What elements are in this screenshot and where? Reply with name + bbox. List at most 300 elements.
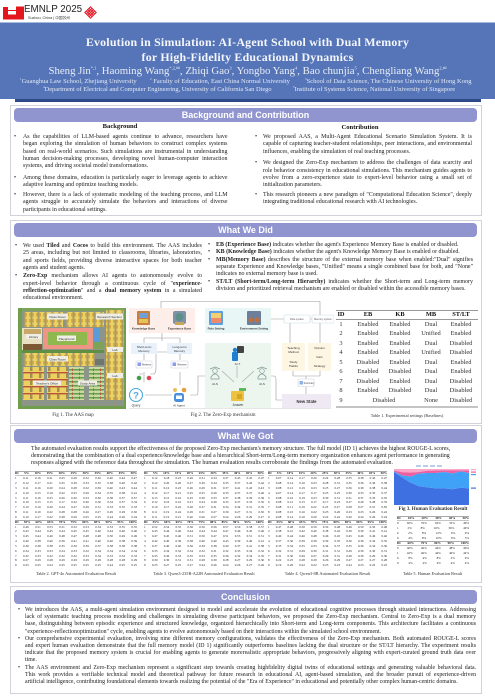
bullet 1: base, distinguishing between episodic experience and structured knowledge, organized hierarchically into Short-term and Long-term components. This architecture facilitates a continuous <box>25 621 476 627</box>
table 2: GPT-4o results: 7 0.10 0.16 0.20 0.24 0.27 0.29 0.31 0.33 0.35 0.33 <box>15 505 137 509</box>
subheading: background: Background <box>103 123 137 130</box>
text block: evaluation summary: demonstrating that the combination of a dual experience/knowledge base and a hierarchical Short-term/Long-term memory organization enhances agent performance in generating <box>31 453 450 459</box>
bullet 2: educational environment. <box>23 295 83 301</box>
table 1 column ST/LT: Disabled <box>450 397 472 404</box>
bullet 1: As the capabilities of LLM-based agents continue to advance, researchers have <box>23 134 228 140</box>
table 1 column KB: Enabled <box>390 359 410 366</box>
affiliations line 2: 5Institute of Systems Science, National University of Singapore <box>293 85 455 93</box>
panel: what we did <box>10 220 482 424</box>
table 1 column MB: Dual <box>425 368 437 375</box>
opinion box <box>308 343 331 371</box>
table 1 column ID <box>337 311 345 404</box>
long-term memory box <box>167 343 192 354</box>
heading: what we got: What We Got <box>218 431 273 441</box>
bullet 1 <box>15 242 202 271</box>
icon: answer: Answer <box>233 403 244 407</box>
table 1 column ST/LT: Enabled <box>451 368 471 375</box>
bullet 2: Zero-Exp mechanism allows AI agents to autonomously evolve to <box>23 273 202 279</box>
table 2: GPT-4o results: 4 0.40 0.38 0.40 0.39 0.41 0.41 0.40 0.40 0.38 0.39 <box>15 539 137 543</box>
heading: conclusion <box>14 590 477 604</box>
text block: conclusion bullets: • <box>18 636 20 642</box>
decision markers <box>137 376 151 380</box>
table 4: Qwen3-8B results <box>268 471 387 567</box>
table 2: GPT-4o results <box>15 471 137 567</box>
table 1 column ID: 5 <box>339 359 343 366</box>
bullet 1: agents and student agents. <box>23 265 85 271</box>
icon: red knot <box>84 6 97 19</box>
table 5: human evaluation: 0 46% 46% 44% 48% 46% <box>397 546 469 550</box>
table 1 column KB: Disabled <box>389 368 411 375</box>
bullet 1: We proposed AAS, a Multi-Agent Educational Scenario Simulation System. It is capable of capturing teacher-student relationships, peer interactions, and environmental influences, enabling the simulation of real teaching processes. <box>263 134 472 154</box>
text block: configuration definitions: • <box>208 242 210 248</box>
table 4: Qwen3-8B results: 1 0.07 0.14 0.17 0.20 0.24 0.28 0.35 0.38 0.43 0.47 <box>268 476 387 480</box>
bullet 3: agents struggle to accurately simulate the behaviors and interactions of diverse <box>23 199 228 205</box>
icon: query <box>130 388 142 408</box>
table 1 column KB: Enabled <box>390 330 410 337</box>
table 4: Qwen3-8B results: 8 0.22 0.25 0.28 0.29 0.26 0.29 0.27 0.27 0.27 0.28 <box>268 558 387 562</box>
table 1 column KB: KB <box>395 311 405 318</box>
table 1 column MB: Dual <box>425 340 437 347</box>
text block: configuration definitions <box>208 242 473 292</box>
table 1 column ST/LT: Enabled <box>451 321 471 328</box>
table 5: human evaluation: 6 2% 8% 12% 6% 6% <box>397 531 469 535</box>
subheading: contribution: Contribution <box>341 124 378 131</box>
heading: what we did: What We Did <box>218 225 273 235</box>
panel: memory bases <box>129 308 195 333</box>
table 1 column KB: Disabled <box>389 387 411 394</box>
table 5: human evaluation: ID 60% 70% 80% 90% 100% <box>397 541 469 545</box>
teaching method box: Habits <box>289 364 298 368</box>
table 4: Qwen3-8B results: 9 0.19 0.20 0.22 0.22 0.23 0.23 0.24 0.23 0.22 0.23 <box>268 563 387 567</box>
text block: configuration definitions: • <box>208 257 210 263</box>
figure: AAS map: Study Area <box>80 382 95 386</box>
header banner <box>0 22 495 99</box>
bullet 2 <box>15 272 202 301</box>
text block: background bullets: • <box>14 175 16 181</box>
text block: environment bullets: • <box>15 243 17 249</box>
bullet 2: time. <box>25 657 37 663</box>
area: ID 0 <box>394 472 469 505</box>
text block: evaluation summary: responses aligned with the reference data throughout the simulation. The human evaluation results corroborate the findings from the automated evaluation. <box>31 460 393 466</box>
caption: table 2: Table 2. GPT-4o Automated Evaluation Result <box>36 571 116 576</box>
affiliations line 2: 4Department of Electrical and Computer Engineering, University of California San Diego <box>43 85 272 93</box>
panel: background and contribution <box>10 105 482 216</box>
table 1 rules <box>336 310 478 408</box>
table 1 column ID: 8 <box>339 387 343 394</box>
table 4: Qwen3-8B results: 6 0.08 0.12 0.15 0.17 0.17 0.23 0.27 0.29 0.28 0.33 <box>268 500 387 504</box>
text block: contribution bullets: • <box>255 134 257 140</box>
icon: query: Query <box>132 404 141 408</box>
table 4: Qwen3-8B results: ID 55% 60% 65% 70% 75% 80% 85% 90% 95% 100% <box>268 520 387 524</box>
text block: conclusion bullets: • <box>18 607 20 613</box>
table 5: human evaluation: 0 92% 76% 62% 52% 49% <box>397 521 469 525</box>
text block: background bullets: • <box>14 134 16 140</box>
bullet 1: systems, and driving societal model transformations. <box>23 163 148 169</box>
new state box: New State <box>296 399 317 404</box>
bullet 1: human decision-making processes, developing novel human-computer interaction <box>23 156 228 162</box>
header underline bar <box>15 99 481 102</box>
bullet 1 <box>14 134 228 169</box>
table 5: human evaluation: 1 42% 46% 44% 46% 44% <box>397 551 469 555</box>
table 2: GPT-4o results: 1 0.49 0.51 0.53 0.51 0.52 0.53 0.54 0.53 0.55 0.55 <box>15 525 137 529</box>
definition MB: MB(Memory Base) describes the structure of the external memory base when enabled:"Dual" signifies separate Experience and Knowledge bases, "Unified" means a single combined base for both, and "None" indicates no external memory base is used. <box>216 257 473 277</box>
table 3: Qwen3-235B results: 5 0.37 0.40 0.40 0.36 0.39 0.38 0.40 0.37 0.41 0.38 <box>144 544 264 548</box>
table 1 column KB <box>388 311 412 394</box>
table 5: human evaluation: 6 8% 4% 8% 2% 6% <box>397 556 469 560</box>
figure: AAS map: Research Section <box>97 315 122 319</box>
figure: AAS map: Class Room <box>49 315 66 319</box>
table 5: human evaluation: 1 2% 8% 16% 36% 40% <box>397 526 469 530</box>
table 4: Qwen3-8B results: 5 0.35 0.34 0.35 0.33 0.34 0.37 0.35 0.36 0.34 0.36 <box>268 544 387 548</box>
figure: AAS map: Teacher's Office <box>36 382 58 386</box>
panel: what we got <box>10 425 482 583</box>
table 3: Qwen3-235B results: 5 0.13 0.15 0.22 0.25 0.30 0.33 0.37 0.38 0.39 0.39 <box>144 496 264 500</box>
table 2: GPT-4o results: 3 0.11 0.16 0.20 0.24 0.28 0.32 0.36 0.40 0.43 0.44 <box>15 486 137 490</box>
figure: AAS map: Library <box>29 335 39 339</box>
teaching method box: Study <box>290 360 298 364</box>
bullet 1 <box>18 606 476 635</box>
area: ID 1 <box>394 471 469 489</box>
table 1 column ID: 6 <box>339 368 343 375</box>
table 3: Qwen3-235B results: ID 5% 10% 15% 20% 25% 30% 35% 40% 45% 50% <box>144 471 264 475</box>
table 3: Qwen3-235B results: 1 0.12 0.18 0.23 0.26 0.31 0.34 0.37 0.43 0.45 0.47 <box>144 476 264 480</box>
table 1 column MB: Dual <box>425 321 437 328</box>
table 5: human evaluation: ID 10% 20% 30% 40% 50% <box>397 516 469 520</box>
table 4: Qwen3-8B results: 2 0.38 0.41 0.42 0.40 0.38 0.42 0.39 0.39 0.41 0.41 <box>268 529 387 533</box>
affiliations line 1 <box>20 77 472 85</box>
table 1 column MB: Dual <box>425 387 437 394</box>
table 1 column ID: ID <box>337 311 345 318</box>
table 4: Qwen3-8B results: 4 0.37 0.36 0.39 0.39 0.39 0.35 0.36 0.36 0.34 0.35 <box>268 539 387 543</box>
table 2: GPT-4o results: 4 0.10 0.15 0.19 0.22 0.25 0.29 0.34 0.35 0.38 0.41 <box>15 491 137 495</box>
icon: knowledge base <box>137 311 150 325</box>
figure: AAS map: Class Room <box>49 358 66 362</box>
table 1: experimental settings <box>336 310 478 408</box>
logo location line: Suzhou, China | 中国苏州 <box>28 16 70 20</box>
table 1 column EB: Disabled <box>357 359 379 366</box>
panel: setup: Role Setting <box>208 326 225 330</box>
bullet 2: reflection-optimization" and a dual memory system in a simulated <box>23 288 202 294</box>
bullet 2: adaptive learning and optimize teaching models. <box>23 182 138 188</box>
panel: setup <box>205 308 271 333</box>
figure: AAS map <box>18 308 126 409</box>
bullet 3: However, there is a lack of systematic modeling of the teaching process, and LLM <box>23 192 228 198</box>
table 3: Qwen3-235B results: 3 0.47 0.45 0.46 0.51 0.50 0.47 0.51 0.53 0.51 0.51 <box>144 534 264 538</box>
text block: contribution bullets <box>255 134 472 205</box>
panel: setup: Environment Setting <box>240 326 268 330</box>
short-term memory box: Short-term <box>137 345 152 349</box>
heading: background and contribution: Background and Contribution <box>182 110 309 120</box>
table 4: Qwen3-8B results: 4 0.07 0.14 0.17 0.17 0.23 0.25 0.30 0.33 0.35 0.37 <box>268 491 387 495</box>
table 1 column KB: Enabled <box>390 340 410 347</box>
icon: AI teacher: AI-T <box>235 362 240 366</box>
small boxes: role and memory system: Memory system <box>314 318 332 321</box>
text block: environment bullets <box>15 242 202 301</box>
bullet 1: began exploring the simulation of human behaviors to construct complex systems <box>23 141 228 147</box>
table 1 column KB: Enabled <box>390 321 410 328</box>
table 3: Qwen3-235B results: 6 0.35 0.34 0.32 0.34 0.32 0.31 0.32 0.33 0.34 0.32 <box>144 549 264 553</box>
caption: figure 1: Fig 1. The AAS map <box>52 413 94 418</box>
table 1 column ID: 2 <box>339 330 343 337</box>
table 3: Qwen3-235B results: 7 0.35 0.36 0.33 0.35 0.33 0.35 0.36 0.32 0.34 0.35 <box>144 554 264 558</box>
table 2: GPT-4o results: 9 0.10 0.17 0.22 0.28 0.26 0.25 0.25 0.24 0.26 0.24 <box>15 515 137 519</box>
panel: memory bases: Experience Base <box>168 326 191 330</box>
table 1 column ST/LT: Disabled <box>450 349 472 356</box>
table 1 column MB: Unified <box>421 349 441 356</box>
table 1 column ID: 9 <box>339 397 343 404</box>
figure: AAS map: Lab <box>112 348 118 352</box>
panel: classroom interaction <box>205 343 271 408</box>
teaching method box: Method <box>288 350 299 354</box>
table 1 column ST/LT: Enabled <box>451 330 471 337</box>
text block: background bullets: • <box>14 192 16 198</box>
panel: memory bases: Knowledge Base <box>132 326 155 330</box>
authors: Sheng Jin*,1, Haoming Wang*,2,✉, Zhiqi Gao3, Yongbo Yang4, Bao chunjia5, Chengliang Wang2,✉ <box>48 65 447 77</box>
table 1 column ST/LT: Enabled <box>451 359 471 366</box>
table 1 column ID: 4 <box>339 349 343 356</box>
heading: what we got <box>14 429 477 443</box>
table 1 disabled merged cell: Disabled <box>373 397 395 404</box>
table 4: Qwen3-8B results: 9 0.08 0.14 0.16 0.20 0.22 0.22 0.20 0.24 0.26 0.24 <box>268 515 387 519</box>
caption: table 1: Table 1. Experimental settings (Baselines) <box>371 413 443 418</box>
logo wordmark: EMNLP 2025 <box>24 4 82 15</box>
table 4: Qwen3-8B results: 7 0.08 0.11 0.19 0.22 0.23 0.27 0.28 0.27 0.31 0.30 <box>268 505 387 509</box>
table 2: GPT-4o results: 6 0.10 0.15 0.15 0.17 0.22 0.26 0.30 0.34 0.37 0.34 <box>15 500 137 504</box>
bullet 2: expert-level behavior through a continuous cycle of "experience- <box>23 281 202 287</box>
opinion box: Fact <box>316 355 323 359</box>
table 3: Qwen3-235B results: 2 0.45 0.44 0.46 0.44 0.44 0.44 0.47 0.46 0.45 0.46 <box>144 529 264 533</box>
table 1 column MB: None <box>424 397 438 404</box>
table 3: Qwen3-235B results <box>144 471 264 567</box>
table 4: Qwen3-8B results: 8 0.08 0.10 0.16 0.22 0.23 0.26 0.23 0.23 0.26 0.24 <box>268 510 387 514</box>
table 1 column MB: Dual <box>425 378 437 385</box>
bullet 3: The AAS environment and Zero-Exp mechanism represent a significant step towards creating highfidelity digital twins of educational settings and generating valuable behavioral data. <box>25 665 476 671</box>
caption: figure 2: Fig 2. The Zero-Exp mechanism <box>190 413 256 418</box>
bullet 3: artificial intelligence, contributing foundational elements towards realizing the potential of the "Era of Experience" in educational and potentially other complex human-centric domains. <box>25 679 458 685</box>
icon: AI agent <box>173 388 186 408</box>
table 1 column MB <box>421 311 441 404</box>
bullet 2: indicate that the proposed memory system is crucial for enabling agents to generate morerealistic appropriate behaviors, progressively aligning with expert-curated ground truth data over <box>25 650 476 656</box>
table 5: human evaluation: 9 4% 4% 4% 4% 4% <box>397 561 469 565</box>
chart legend top <box>416 466 442 467</box>
table 1 column ID: 7 <box>339 378 343 385</box>
icon: experience base <box>173 311 186 325</box>
table 2: GPT-4o results: 3 0.45 0.44 0.46 0.48 0.47 0.48 0.48 0.50 0.49 0.49 <box>15 534 137 538</box>
chart: human evaluation stacked area <box>394 466 476 505</box>
bullet 2: Our comprehensive experimental evaluation, involving nine different memory configurations, validates the effectiveness of the Zero-Exp mechanism. Both automated ROUGE-L scores <box>25 636 476 642</box>
bullet 1: We used Tiled and Cocos to build this environment. The AAS includes <box>23 243 202 249</box>
chart legend right <box>471 469 476 489</box>
table 3: Qwen3-235B results: 1 0.52 0.54 0.55 0.56 0.56 0.56 0.57 0.56 0.58 0.57 <box>144 525 264 529</box>
table 1 column EB: Disabled <box>357 378 379 385</box>
text block: configuration definitions: • <box>208 279 210 285</box>
table 4: Qwen3-8B results: 3 0.40 0.44 0.46 0.48 0.46 0.45 0.45 0.46 0.46 0.46 <box>268 534 387 538</box>
text block: contribution bullets: • <box>255 160 257 166</box>
bullet 1: lack of systematic teaching process modeling and challenges in simulating diverse participant behaviors, we proposed the Zero-Exp mechanism. Central to Zero-Exp is a dual memory <box>25 614 476 620</box>
table 4: Qwen3-8B results: 2 0.08 0.14 0.16 0.23 0.28 0.31 0.35 0.36 0.36 0.38 <box>268 481 387 485</box>
title: for High-Fidelity Educational Dynamics <box>142 50 353 64</box>
bullet 2 <box>25 636 476 665</box>
long-term memory box: Memory <box>174 349 186 353</box>
bullet 2 <box>14 174 228 188</box>
icon: AI student left: AI-S <box>212 382 218 386</box>
caption: table 4: Table 4. Qwen3-8B Automated Evaluation Result <box>285 571 370 576</box>
small boxes: role and memory system: Role system <box>290 318 304 321</box>
text block: evaluation summary: The automated evaluation results support the effectiveness of the proposed Zero-Exp mechanism's memory structure. The full model (ID 1) achieves the highest ROUGE-L scores, <box>31 446 450 452</box>
bullet 3: participants in educational settings. <box>23 206 107 212</box>
panel: conclusion <box>10 586 482 694</box>
table 4: Qwen3-8B results: 5 0.08 0.16 0.19 0.23 0.30 0.31 0.31 0.37 0.35 0.35 <box>268 496 387 500</box>
table 1 column KB: Enabled <box>390 349 410 356</box>
bullet 1: 25 areas, including but not limited to classrooms, libraries, laboratories, <box>23 250 202 256</box>
table 3: Qwen3-235B results: 8 0.30 0.30 0.31 0.31 0.28 0.30 0.28 0.27 0.29 0.30 <box>144 558 264 562</box>
bullet 2: Among these domains, education is particularly eager to leverage agents to achieve <box>23 175 228 181</box>
table 1 column EB: Enabled <box>358 330 378 337</box>
title <box>86 35 409 64</box>
table 2: GPT-4o results: ID 55% 60% 65% 70% 75% 80% 85% 90% 95% 100% <box>15 520 137 524</box>
definition EB: EB (Experience Base) indicates whether the agent's Experience Memory Base is enabled or disabled. <box>216 242 458 248</box>
affiliations line 2 <box>43 85 455 93</box>
figure: AAS map: Lab <box>112 374 118 378</box>
table 2: GPT-4o results: 5 0.36 0.38 0.38 0.35 0.39 0.39 0.37 0.38 0.38 0.38 <box>15 544 137 548</box>
bullet 3 <box>14 192 228 212</box>
table 2: GPT-4o results: 8 0.27 0.29 0.28 0.29 0.29 0.29 0.29 0.28 0.28 0.29 <box>15 558 137 562</box>
table 1 column KB: Enabled <box>390 378 410 385</box>
table 4: Qwen3-8B results: 3 0.08 0.12 0.19 0.23 0.25 0.27 0.36 0.39 0.38 0.44 <box>268 486 387 490</box>
retrieve boxes: Retrieve <box>177 364 187 366</box>
short-term memory box <box>131 343 157 354</box>
table 4: Qwen3-8B results: ID 5% 10% 15% 20% 25% 30% 35% 40% 45% 50% <box>268 471 387 475</box>
table 2: GPT-4o results: 6 0.34 0.33 0.33 0.34 0.33 0.32 0.34 0.34 0.34 0.34 <box>15 549 137 553</box>
teaching method box <box>282 343 305 371</box>
table 1 column MB: Unified <box>421 330 441 337</box>
bullet 1: and sports fields, providing diverse interactive spaces for both teacher <box>23 258 202 264</box>
table 1 column MB: MB <box>426 311 436 318</box>
bullet 3: This research pioneers a new paradigm of "Computational Education Science", deeply integrating traditional educational research with AI technologies. <box>263 192 472 205</box>
area: ID 6 <box>394 470 469 476</box>
affiliations line 1: 2 Faculty of Education, East China Normal University <box>150 77 290 85</box>
opinion box: Strategy <box>314 364 326 368</box>
icon: query: ? <box>133 390 139 402</box>
icon: red logo block <box>3 6 24 20</box>
icon: AI student right: AI-S <box>259 382 265 386</box>
affiliations line 1: 3School of Data Science, The Chinese University of Hong Kong <box>305 77 471 85</box>
table 1 column ST/LT: Disabled <box>450 340 472 347</box>
text block: configuration definitions: • <box>208 249 210 255</box>
table 4: Qwen3-8B results: 1 0.47 0.48 0.50 0.50 0.50 0.48 0.49 0.50 0.50 0.48 <box>268 525 387 529</box>
text block: conclusion bullets <box>18 606 476 685</box>
long-term memory box: Long-term <box>172 345 187 349</box>
table 3: Qwen3-235B results: 9 0.25 0.27 0.25 0.27 0.24 0.26 0.24 0.26 0.27 0.26 <box>144 563 264 567</box>
table 3: Qwen3-235B results: 2 0.12 0.20 0.20 0.27 0.29 0.34 0.35 0.37 0.42 0.42 <box>144 481 264 485</box>
caption: table 3: Table 3. Qwen3-235B-A22B Automated Evaluation Result <box>153 571 255 576</box>
text block: conclusion bullets: • <box>18 665 20 671</box>
text block: background bullets <box>14 134 228 212</box>
text block: evaluation summary <box>31 446 450 466</box>
table 3: Qwen3-235B results: 7 0.10 0.17 0.22 0.26 0.27 0.31 0.34 0.34 0.31 0.35 <box>144 505 264 509</box>
table 1 column ST/LT: Disabled <box>450 378 472 385</box>
table 1 column ST/LT <box>450 311 472 404</box>
heading: what we did <box>14 223 477 237</box>
table 2: GPT-4o results: ID 5% 10% 15% 20% 25% 30% 35% 40% 45% 50% <box>15 471 137 475</box>
table 1 column EB: EB <box>364 311 372 318</box>
table 4: Qwen3-8B results: 7 0.31 0.30 0.29 0.27 0.29 0.31 0.29 0.30 0.29 0.30 <box>268 554 387 558</box>
table 1 column ID: 1 <box>339 321 343 328</box>
bullet 2: We designed the Zero-Exp mechanism to address the challenges of data scarcity and role behavior consistency in educational simulations. This mechanism guides agents to evolve from a zero-experience state to expert-level behavior using a small set of initialization parameters. <box>263 160 472 188</box>
table 2: GPT-4o results: 2 0.12 0.17 0.21 0.25 0.29 0.33 0.35 0.38 0.40 0.42 <box>15 481 137 485</box>
bullet 3: This work provides a verifiable technical model and theoretical pathway for future research in educational AI, agent-based simulation, and the broader pursuit of experience-driven <box>25 672 476 678</box>
title: Evolution in Simulation: AI-Agent School with Dual Memory <box>86 35 409 49</box>
table 2: GPT-4o results: 1 0.11 0.16 0.21 0.25 0.29 0.32 0.36 0.40 0.44 0.47 <box>15 476 137 480</box>
table 1 column ST/LT: Disabled <box>450 387 472 394</box>
text block: environment bullets: • <box>15 273 17 279</box>
summary box <box>298 379 315 386</box>
table 1 column MB: Dual <box>425 359 437 366</box>
table 2: GPT-4o results: 9 0.23 0.25 0.24 0.25 0.25 0.25 0.25 0.24 0.25 0.25 <box>15 563 137 567</box>
logo: EMNLP 2025 <box>3 4 97 20</box>
definition KB: KB (Knowledge Base) indicates whether the agent's Knowledge Memory Base is enabled or disabled. <box>216 249 460 255</box>
figure: Zero-Exp mechanism diagram <box>128 301 334 409</box>
table 2: GPT-4o results: 7 0.32 0.33 0.32 0.32 0.32 0.33 0.34 0.33 0.33 0.33 <box>15 554 137 558</box>
bullet 1: We introduces the AAS, a multi-agent simulation environment designed to model and accelerate the evolution of educational cognitive processes through situated interactions. Addressing <box>25 607 476 613</box>
table 3: Qwen3-235B results: 8 0.11 0.19 0.24 0.29 0.31 0.27 0.30 0.27 0.31 0.30 <box>144 510 264 514</box>
table 5: human evaluation: 9 4% 8% 10% 6% 5% <box>397 536 469 540</box>
table 3: Qwen3-235B results: 4 0.12 0.17 0.21 0.25 0.25 0.29 0.33 0.37 0.37 0.40 <box>144 491 264 495</box>
bullet 2: and expert human evaluation demonstrate that the full memory model (ID 1) significantly outperforms baselines lacking the dual structure or the ST/LT hierarchy. The experiment results <box>25 643 476 649</box>
small boxes: role and memory system <box>284 315 334 323</box>
bullet 1: "experience-reflectionoptimization" cycle, enabling agents to evolve autonomously based on their interactions within the simulated school environment. <box>25 629 381 635</box>
caption: table 5: Table 5. Human Evaluation Result <box>403 571 462 576</box>
table 2: GPT-4o results: 8 0.11 0.19 0.22 0.28 0.28 0.26 0.27 0.29 0.29 0.30 <box>15 510 137 514</box>
bullet 3 <box>25 665 476 686</box>
text block: contribution bullets: • <box>255 192 257 198</box>
connectors <box>139 302 320 400</box>
opinion box: Opinion <box>314 346 325 350</box>
table 4: Qwen3-8B results: 6 0.32 0.31 0.29 0.30 0.31 0.31 0.29 0.30 0.30 0.31 <box>268 549 387 553</box>
table 1 column ID: 3 <box>339 340 343 347</box>
table 1 column EB: Enabled <box>358 387 378 394</box>
table 1 column EB: Enabled <box>358 349 378 356</box>
table 3: Qwen3-235B results: 6 0.12 0.16 0.16 0.21 0.24 0.29 0.33 0.37 0.33 0.35 <box>144 500 264 504</box>
table 3: Qwen3-235B results: 3 0.11 0.16 0.23 0.26 0.29 0.31 0.37 0.41 0.43 0.43 <box>144 486 264 490</box>
caption: figure 3: Fig 3. Human Evaluation Result <box>399 507 467 512</box>
table 2: GPT-4o results: 5 0.11 0.16 0.23 0.26 0.30 0.33 0.36 0.38 0.37 0.37 <box>15 496 137 500</box>
table 1 column EB: Enabled <box>358 340 378 347</box>
heading: conclusion: Conclusion <box>221 592 270 602</box>
table 5: human evaluation <box>397 516 469 565</box>
table 3: Qwen3-235B results: 9 0.11 0.19 0.21 0.26 0.26 0.27 0.24 0.26 0.29 0.27 <box>144 515 264 519</box>
affiliations line 1: 1Guanghua Law School, Zhejiang University <box>20 77 137 85</box>
icon: role setting <box>209 311 223 325</box>
icon: AI agent: AI Agent <box>173 404 185 408</box>
table 1 column EB: Enabled <box>358 321 378 328</box>
retrieve boxes <box>136 361 188 368</box>
short-term memory box: Memory <box>138 349 150 353</box>
icon: environment setting <box>247 311 261 325</box>
definition ST/LT: ST/LT (Short-term/Long-term Hierarchy) indicates whether the Short-term and Long-term memory division and prioritized retrieval mechanism are enabled or disabled within the accessible memory bases. <box>216 279 473 292</box>
table 2: GPT-4o results: 2 0.43 0.44 0.45 0.44 0.45 0.45 0.46 0.44 0.46 0.46 <box>15 529 137 533</box>
heading: background and contribution <box>14 108 477 122</box>
figure: AAS map: Playground <box>59 337 75 341</box>
table 3: Qwen3-235B results: ID 55% 60% 65% 70% 75% 80% 85% 90% 95% 100% <box>144 520 264 524</box>
area: ID 9 <box>394 469 469 473</box>
table 1 column EB <box>356 311 380 394</box>
retrieve boxes: Retrieve <box>142 364 152 366</box>
new state box <box>282 394 331 408</box>
summary box: Summary <box>304 382 315 385</box>
teaching method box: Teaching <box>287 346 300 350</box>
bullet 1: based on real-world scenarios. Such simulations are instrumental in understanding <box>23 148 228 154</box>
